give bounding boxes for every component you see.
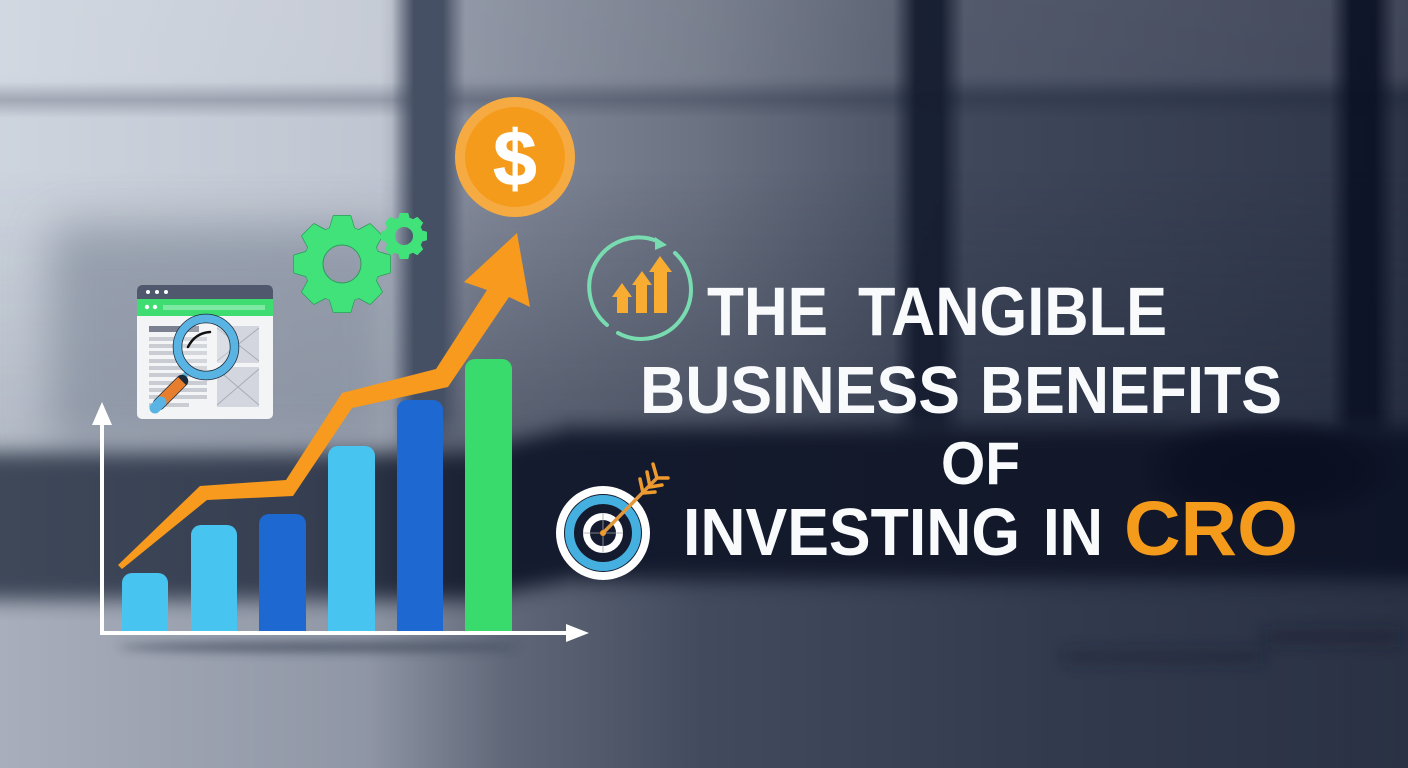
icon: dollar coin: $ — [493, 114, 537, 202]
icon: dollar coin — [455, 97, 575, 217]
title: BUSINESS — [640, 353, 960, 428]
chart ground shadow — [118, 642, 518, 652]
bars — [122, 359, 512, 631]
title: CRO — [1124, 486, 1298, 572]
big gear — [294, 216, 390, 312]
title: INVESTING — [683, 495, 1020, 570]
rising orange arrow — [118, 233, 530, 569]
title — [640, 273, 1298, 572]
axes — [92, 402, 589, 642]
icon: gears — [294, 214, 426, 312]
icon: web page under magnifying glass — [137, 285, 273, 419]
magnifying glass — [155, 318, 234, 408]
title: BENEFITS — [980, 353, 1282, 428]
title: IN — [1043, 495, 1103, 570]
icon: growth cycle arrows — [589, 237, 691, 339]
title: TANGIBLE — [858, 273, 1167, 350]
title: THE — [707, 273, 828, 350]
small gear — [382, 214, 426, 258]
title: OF — [941, 430, 1020, 497]
icon: target with arrow — [556, 464, 668, 580]
chart: growth bars with axes and arrow — [92, 233, 589, 652]
